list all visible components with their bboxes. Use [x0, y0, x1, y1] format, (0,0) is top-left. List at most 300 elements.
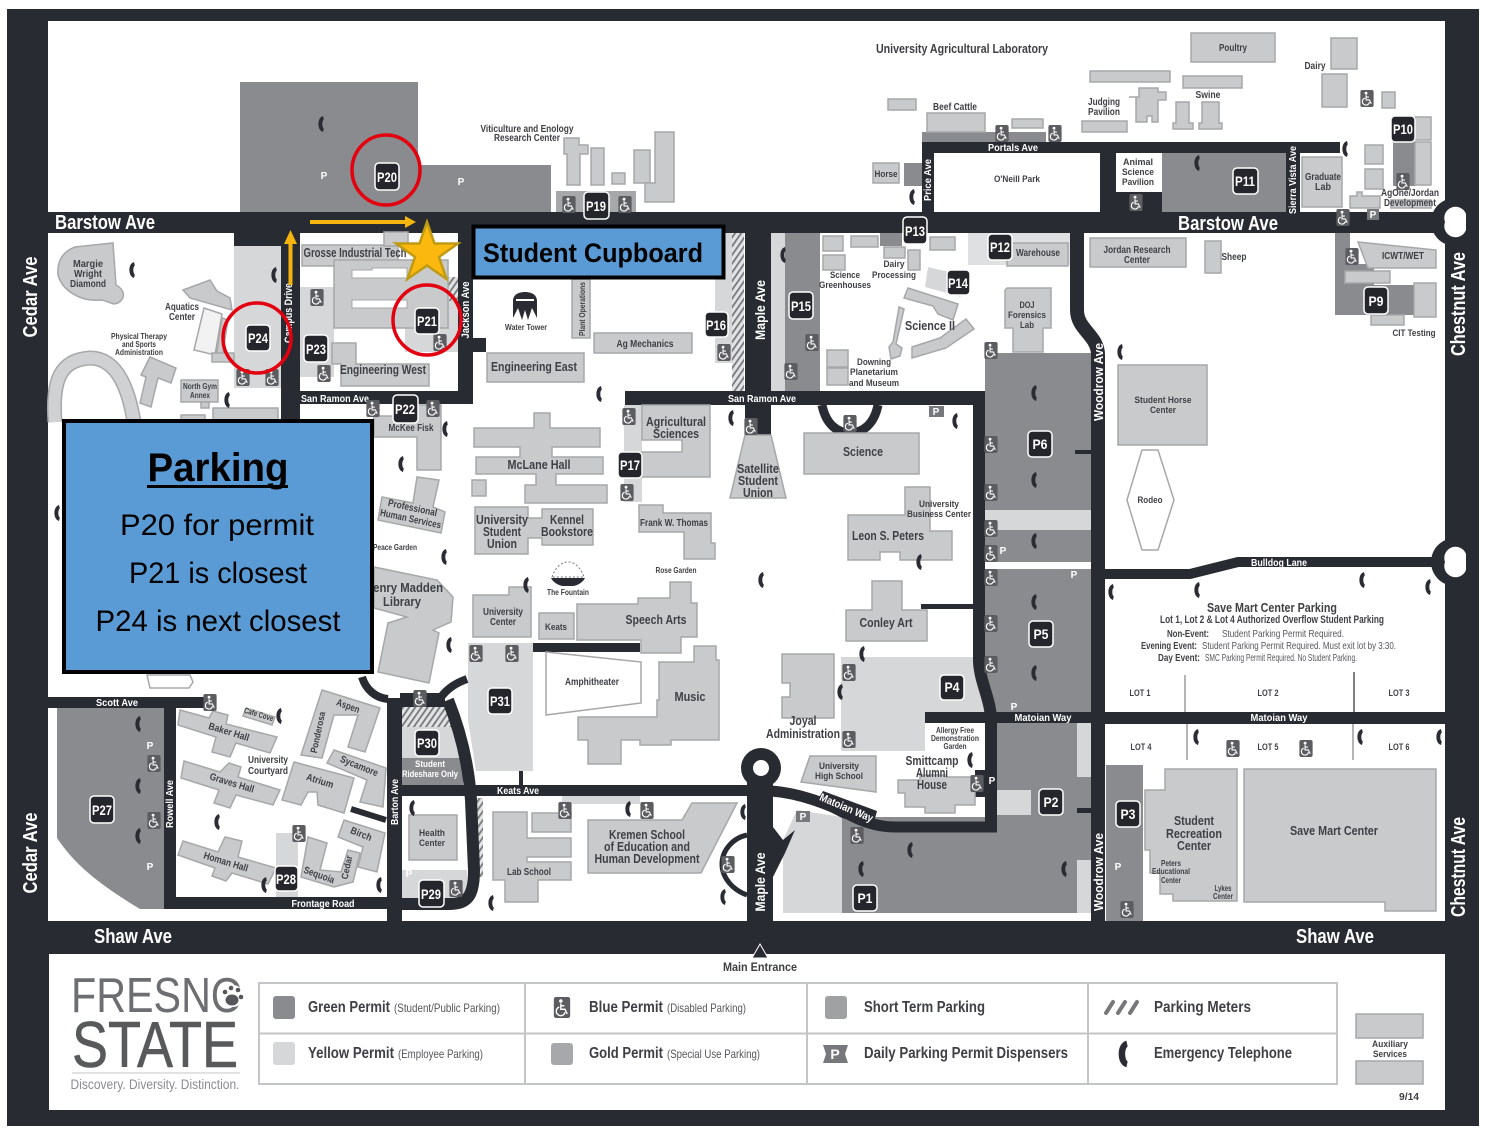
lot P21: [405, 300, 458, 352]
callout: Parking: P24 is next closest: [96, 605, 341, 638]
McLane Hall: [472, 413, 607, 503]
lot P2 yellow square: [997, 790, 1031, 815]
track: [54, 358, 134, 422]
San Ramon Ave east: San Ramon Ave: [728, 393, 796, 405]
Woodrow Ave south: Woodrow Ave: [1091, 833, 1106, 911]
Science U road: [822, 405, 878, 433]
callout: Student Cupboard: Student Cupboard: [483, 238, 703, 268]
badge P1: P1: [858, 890, 873, 906]
Sierra Vista Ave: Sierra Vista Ave: [1287, 146, 1299, 214]
Judging Pavilion: Judging: [1088, 97, 1120, 108]
lot P14: [925, 267, 961, 297]
Matoian Way east: Matoian Way: [1250, 712, 1308, 724]
legend: Blue Permit: [554, 997, 746, 1018]
Save Mart Center: [1244, 769, 1436, 911]
Peace Garden: Peace Garden: [373, 543, 417, 552]
Plant Operations: [572, 279, 590, 338]
DOJ Forensics Lab: [1005, 288, 1051, 352]
Music: Music: [674, 689, 706, 704]
Satellite Student Union: Union: [743, 485, 773, 500]
red circle P24: [223, 303, 291, 373]
lot P1: [841, 817, 1091, 913]
legend: Blue Permit: Blue Permit: [589, 999, 664, 1016]
Leon S. Peters: [848, 487, 952, 560]
Judging Pavilion: [1082, 88, 1166, 132]
University Business Center: [907, 499, 971, 520]
badge P20: P20: [377, 169, 397, 185]
curve to library: [362, 677, 388, 699]
Chestnut circle bottom: [1431, 538, 1479, 586]
Margie Wright Diamond: [58, 243, 123, 304]
Beef Cattle: Beef Cattle: [933, 102, 977, 113]
Speech Arts: [577, 582, 697, 653]
Maple wedge: [773, 827, 795, 877]
Physical Therapy and Sports Administration: [111, 331, 176, 407]
Ag Mechanics: [594, 333, 692, 353]
Matoian Way west: [925, 712, 1091, 723]
Cafe Cove: Cafe Cove: [243, 706, 275, 723]
Student Recreation Center: Lykes: [1214, 883, 1232, 893]
small barn: [1382, 92, 1395, 108]
Physical Therapy and Sports Administration: and Sports: [122, 339, 156, 349]
Dairy: Dairy: [1304, 61, 1326, 72]
Fresno State logo: FRESNO: [71, 969, 243, 1023]
Lot dividers: [1185, 672, 1354, 760]
badge P29: P29: [421, 886, 441, 902]
arrow east along Barstow: [310, 216, 416, 228]
Student Recreation Center: Peters: [1161, 858, 1181, 868]
Henry Madden Library: Library: [383, 594, 422, 609]
Student Recreation Center: Center: [1177, 838, 1211, 853]
callout: Parking: [64, 421, 372, 672]
badge P5: P5: [1034, 626, 1049, 642]
Grosse Industrial Tech: Grosse Industrial Tech: [304, 245, 407, 260]
badge P9: P9: [1368, 293, 1384, 309]
lot P23: [300, 287, 334, 377]
Maple Ave north: Maple Ave: [752, 280, 768, 340]
south Chestnut circle centre: [1444, 547, 1466, 577]
Poultry: [1191, 33, 1275, 62]
Save Mart Center Parking notes: Student Parking Permit Required. Must exit lot by 3:30.: [1202, 640, 1396, 652]
Lot labels: LOT 6: [1388, 742, 1410, 753]
badge P19: [584, 192, 609, 219]
University High School: High School: [815, 771, 863, 782]
badge P16: P16: [706, 317, 726, 333]
Smittcamp Alumni House: [898, 753, 975, 813]
Aquatics Center: Aquatics: [165, 302, 199, 313]
badge P27: P27: [92, 802, 112, 818]
Save Mart Center Parking notes: Evening Event:: [1141, 640, 1197, 652]
street labels: [20, 143, 1470, 948]
long barn one: [1090, 71, 1170, 82]
Amphitheater bar: [533, 643, 640, 652]
Science greenhouses: Science: [830, 270, 860, 281]
Price Ave: Price Ave: [922, 159, 934, 201]
Kremen School of Education and Human Development: of Education and: [604, 839, 690, 854]
legend: Yellow Permit: (Employee Parking): [398, 1047, 483, 1061]
P30 top road: [400, 693, 445, 707]
Sheep: Sheep: [1222, 252, 1246, 263]
Fresno State logo: Discovery. Diversity. Distinction.: [70, 1077, 240, 1092]
Atrium: [282, 762, 354, 813]
lot P2 yellow strip: [1077, 723, 1091, 777]
Dairy Processing: Processing: [872, 270, 916, 281]
Student Horse Center: Center: [1150, 405, 1176, 416]
callout: Parking: P21 is closest: [129, 557, 308, 590]
Baker Hall: Baker Hall: [207, 721, 251, 744]
Keats Ave: Keats Ave: [497, 785, 539, 797]
Jackson Ave: Jackson Ave: [460, 282, 472, 338]
Agricultural Sciences: Agricultural: [646, 414, 706, 429]
lot P6: [985, 353, 1091, 510]
Science II: Science II: [905, 318, 955, 333]
legend: Daily Parking Permit Dispensers: Daily Parking Permit Dispensers: [864, 1045, 1068, 1062]
Speech Arts: Speech Arts: [626, 612, 686, 627]
badge P4: [940, 675, 964, 700]
Satellite Student Union: [730, 435, 786, 500]
Auxiliary Services: [1356, 1014, 1423, 1084]
Student Recreation Center: Center: [1161, 875, 1182, 885]
Leon S. Peters: Leon S. Peters: [852, 528, 924, 543]
University Student Union and Kennel Bookstore: Kennel: [550, 512, 584, 527]
Baker Hall: [178, 710, 277, 757]
badge P12: P12: [990, 239, 1010, 255]
badge P21: P21: [417, 313, 437, 329]
Animal Science Pavilion: Animal: [1123, 157, 1153, 168]
Maple Ave north: [745, 233, 771, 393]
badge P4: P4: [944, 679, 960, 695]
legend: Green Permit: (Student/Public Parking): [394, 1001, 500, 1015]
short-term parking P markers: P: [458, 177, 465, 188]
badge P14: P14: [948, 275, 968, 291]
CIT Testing: CIT Testing: [1392, 328, 1436, 339]
Conley Art: Conley Art: [860, 615, 913, 630]
The Fountain: The Fountain: [547, 587, 589, 597]
Ag Mechanics: Ag Mechanics: [616, 339, 674, 350]
Barton Ave: Barton Ave: [389, 779, 401, 825]
badge P27: [90, 796, 114, 823]
Viticulture buildings: Research Center: [494, 133, 560, 144]
badge P10: P10: [1393, 121, 1413, 137]
main roundabout centre: [753, 760, 769, 776]
Shaw Ave east: Shaw Ave: [1296, 926, 1374, 948]
legend table: [259, 983, 1337, 1084]
map date: 9/14: [1399, 1091, 1419, 1103]
legend: Green Permit: [273, 996, 500, 1019]
Frontage Road: [164, 897, 387, 909]
Allergy Free Demonstration Garden: Allergy Free: [936, 725, 974, 735]
Aquatics Center: Center: [169, 312, 195, 323]
San Ramon Ave east: [625, 391, 985, 405]
Water Tower: Water Tower: [505, 322, 548, 332]
Bulldog Lane: Bulldog Lane: [1251, 558, 1307, 569]
badge P30: [415, 730, 439, 756]
Margie Wright Diamond: Margie: [73, 259, 103, 270]
short-term parking P markers: P: [1011, 702, 1018, 713]
Beef Cattle: [888, 99, 1043, 132]
badge P11: [1233, 168, 1258, 194]
Animal Science Pavilion: Pavilion: [1122, 177, 1154, 188]
University Courtyard: [248, 755, 288, 777]
badge P3: [1116, 801, 1140, 827]
Frontage Road: Frontage Road: [292, 898, 354, 910]
Keats: Keats: [545, 622, 567, 633]
Graduate Lab: Lab: [1315, 182, 1331, 193]
Chestnut circle top: [1431, 198, 1479, 246]
Amphitheater: [546, 652, 641, 715]
road by animal science: [1100, 153, 1162, 212]
badge P30: P30: [417, 735, 437, 751]
badge P22: [393, 395, 418, 423]
Allergy Free Demonstration Garden: [925, 723, 979, 763]
Agricultural Sciences: [642, 405, 710, 477]
Agricultural laboratory heading: University Agricultural Laboratory: [876, 41, 1049, 56]
Engineering West: Engineering West: [340, 362, 427, 377]
Jordan Research Center: [1090, 238, 1186, 267]
Viticulture buildings: [480, 124, 674, 202]
Rowell Ave: Rowell Ave: [164, 780, 176, 828]
Matoian Way label block: [815, 791, 877, 826]
University Business Center: University: [919, 499, 960, 510]
north Chestnut circle centre: [1444, 207, 1466, 237]
lot P4: [841, 657, 985, 751]
short-term parking P markers: P: [147, 741, 154, 752]
badge P2: [1039, 789, 1063, 815]
emergency telephone icons: [54, 116, 1442, 911]
badge P17: P17: [620, 457, 640, 473]
Graves Hall: Graves Hall: [208, 772, 256, 796]
Smittcamp Alumni House: Alumni: [916, 765, 948, 780]
badge P13: [903, 217, 927, 244]
badge P14: [947, 270, 970, 295]
Science II: [889, 288, 974, 359]
University Student Union and Kennel Bookstore: [475, 507, 593, 554]
Warehouse: Warehouse: [1016, 248, 1060, 259]
Lot labels: LOT 4: [1130, 742, 1152, 753]
Kremen School of Education and Human Development: Human Development: [594, 851, 700, 866]
legend: Short Term Parking: [825, 996, 985, 1019]
ICWT/WET: ICWT/WET: [1382, 251, 1424, 262]
barn pair: [1173, 102, 1222, 129]
Student Recreation Center: Center: [1213, 891, 1234, 901]
O'Neill Park: O'Neill Park: [994, 174, 1041, 185]
badge P15: [789, 292, 813, 319]
Sequoia and Cedar: Sequoia: [302, 865, 336, 886]
Jackson stub: [473, 338, 486, 352]
Science greenhouses: Greenhouses: [819, 280, 871, 291]
Grosse Industrial Tech: [302, 232, 448, 328]
legend: Emergency Telephone: Emergency Telephone: [1154, 1045, 1292, 1062]
Jordan Research Center: Center: [1124, 255, 1150, 266]
Aspen and Ponderosa: Ponderosa: [309, 710, 328, 754]
DOJ Forensics Lab: Lab: [1020, 320, 1034, 331]
P6 stub: [1075, 450, 1091, 454]
Save Mart Center Parking notes: Student Parking Permit Required.: [1222, 628, 1344, 640]
Science: Science: [843, 444, 883, 459]
Kremen School of Education and Human Development: [588, 803, 737, 873]
McKee Fisk: [374, 405, 441, 470]
Chestnut Ave north: Chestnut Ave: [1448, 252, 1470, 356]
Viticulture buildings: Viticulture and Enology: [480, 124, 574, 135]
Downing Planetarium and Museum: Planetarium: [850, 367, 898, 378]
Graduate Lab: [1302, 157, 1342, 207]
Professional Human Services: Human Services: [379, 508, 442, 531]
Birch: Birch: [349, 825, 373, 844]
Woodrow Ave north: [1077, 233, 1098, 921]
Horse: [873, 163, 899, 183]
lot P12: [968, 233, 1070, 265]
Atrium: Atrium: [305, 772, 335, 791]
Campus Drive: [281, 233, 300, 423]
short-term parking P markers: P: [406, 869, 413, 880]
Barstow side block: [234, 233, 300, 246]
short-term parking P markers: P: [989, 776, 996, 787]
Professional Human Services: [378, 477, 445, 533]
legend: Parking Meters: [1106, 999, 1251, 1016]
lot P1 yellow: [783, 810, 842, 913]
Poultry: Poultry: [1219, 43, 1247, 54]
badge P5: [1029, 621, 1053, 647]
Allergy Free Demonstration Garden: Demonstration: [931, 733, 979, 743]
Henry Madden Library: [365, 567, 453, 683]
lot P15: [785, 233, 820, 391]
Aspen and Ponderosa: [301, 690, 380, 758]
lot P11: [1162, 153, 1286, 212]
lot P3: [1106, 765, 1143, 921]
permit dispenser markers: P: [800, 812, 807, 823]
Agricultural Sciences: Sciences: [653, 426, 699, 441]
Graves Hall: [181, 761, 280, 808]
badge P16: [705, 312, 728, 337]
legend: Parking Meters: Parking Meters: [1154, 999, 1251, 1016]
badge P24: P24: [248, 330, 268, 346]
Auxiliary Services: Auxiliary: [1372, 1039, 1409, 1050]
lot P13: [880, 233, 902, 246]
McKee Fisk: McKee Fisk: [388, 423, 434, 434]
Cedar Ave south: Cedar Ave: [20, 812, 42, 894]
Science: [804, 433, 919, 474]
Jackson Ave: [458, 233, 473, 404]
legend: Yellow Permit: [273, 1042, 483, 1065]
lot P1 yellow strip: [1077, 860, 1091, 913]
star marking the Student Cupboard: [396, 222, 458, 279]
Cedar Ave north: Cedar Ave: [20, 256, 42, 338]
San Ramon Ave west: [300, 391, 473, 404]
Matoian Way curved: Matoian Way: [818, 792, 875, 825]
road end and roundabout centres: [753, 207, 1466, 776]
lot P17: [624, 405, 642, 502]
badge P29: [419, 880, 444, 907]
Rose Garden: Rose Garden: [656, 566, 697, 575]
badge P13: P13: [905, 223, 925, 239]
Lot labels: [1130, 688, 1410, 753]
Engineering East: [487, 353, 584, 382]
short-term parking P markers: P: [1115, 862, 1122, 873]
Satellite Student Union: Satellite: [737, 461, 779, 476]
McLane Hall: McLane Hall: [508, 457, 570, 472]
central campus buildings: [365, 405, 1436, 911]
University High School: University: [819, 761, 860, 772]
Professional Human Services: Professional: [387, 498, 438, 519]
badge P2: P2: [1044, 794, 1059, 810]
North Gym Annex: North Gym: [183, 381, 217, 391]
DOJ Forensics Lab: Forensics: [1008, 310, 1046, 321]
Save Mart Center Parking notes: [1141, 600, 1396, 664]
Water Tower: [505, 292, 548, 332]
Student Horse Center: [1118, 365, 1207, 445]
Satellite Student Union: Student: [738, 473, 779, 488]
Swine: [1183, 76, 1242, 101]
lot P10: [1393, 140, 1415, 186]
lot P6 lower: [985, 530, 1091, 562]
Fresno State logo: STATE: [72, 1008, 238, 1081]
Chestnut Ave south: Chestnut Ave: [1448, 817, 1470, 917]
disabled parking icons: [147, 90, 1410, 918]
Horse: Horse: [874, 169, 898, 180]
badge P6: P6: [1032, 436, 1048, 452]
legend panel background: [49, 954, 1445, 1110]
AgOne/Jordan Development: [1381, 188, 1439, 209]
Bulldog Lane: [1105, 562, 1445, 574]
Chestnut edge patch: [1466, 190, 1479, 590]
short-term parking P markers: [147, 171, 1122, 880]
Matoian Way centre: Matoian Way: [1014, 712, 1072, 724]
DOJ Forensics Lab: DOJ: [1020, 300, 1034, 311]
badge P23: [304, 335, 328, 362]
Dairy: [1304, 38, 1357, 107]
Student Rideshare Only: Rideshare Only: [402, 769, 458, 779]
central service road: [979, 405, 991, 828]
Homan Hall: Homan Hall: [202, 851, 250, 875]
lot P2: [997, 723, 1091, 826]
Plant Operations: Plant Operations: [577, 282, 587, 336]
main entrance marker: Main Entrance: [723, 960, 797, 974]
badge P22: P22: [395, 401, 415, 417]
Lot labels: LOT 2: [1258, 688, 1278, 699]
AgOne/Jordan Development: AgOne/Jordan: [1381, 188, 1439, 199]
Student Rideshare Only: [402, 759, 458, 779]
lot horse: [904, 163, 922, 186]
Matoian Way curve: [771, 791, 997, 827]
Smittcamp block: [975, 770, 997, 797]
Save Mart Center Parking notes: Save Mart Center Parking: [1207, 600, 1337, 615]
short-term parking P markers: P: [321, 171, 328, 182]
Lab School: [493, 812, 571, 902]
lot P19: [556, 191, 636, 212]
Birch: [338, 820, 385, 872]
Joyal Administration: Administration: [766, 726, 840, 741]
permit dispenser markers: P: [1370, 210, 1377, 221]
badge P1: [853, 885, 877, 911]
parking lots: [57, 82, 1415, 921]
Maple Ave south: [747, 780, 773, 921]
badge P9: [1364, 287, 1388, 314]
Frank W. Thomas: [639, 505, 715, 559]
route arrows: [284, 216, 416, 285]
Aspen and Ponderosa: Aspen: [335, 697, 361, 716]
University Student Union and Kennel Bookstore: Bookstore: [541, 524, 593, 539]
Portals Ave: Portals Ave: [988, 143, 1038, 154]
road network: [48, 142, 1479, 921]
Shaw Ave west: Shaw Ave: [94, 926, 172, 948]
Campus Drive: Campus Drive: [283, 283, 295, 343]
Barton Ave: [387, 698, 402, 921]
Homan Hall: [178, 837, 276, 884]
legend: Daily Parking Permit Dispensers: P: [830, 1046, 840, 1062]
arrow up Campus Drive: [284, 230, 297, 285]
P2 stub: [1077, 808, 1091, 813]
legend: Gold Permit: (Special Use Parking): [667, 1047, 760, 1061]
